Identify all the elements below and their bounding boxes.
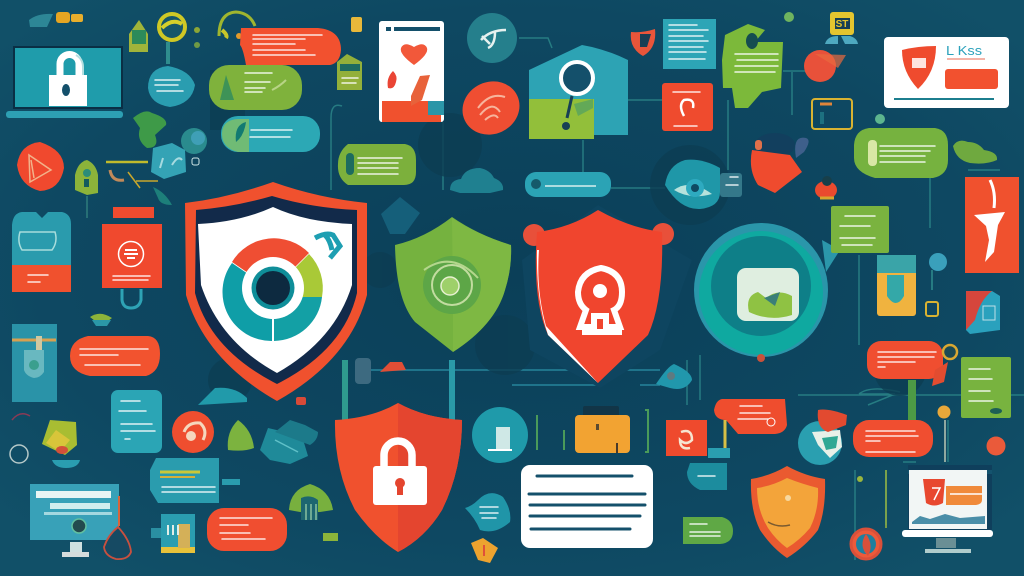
callout: teal pill centre [525, 172, 611, 197]
panel: teal globe with screen [694, 223, 840, 362]
callout: red pill lower right [853, 420, 933, 457]
callout: teal pill [221, 116, 320, 152]
panel: orange folder [575, 406, 630, 453]
panel: teal yellow card [151, 514, 195, 553]
icon: teal cloud small [198, 388, 247, 405]
icon: green mushroom [289, 484, 338, 541]
icon: small red apple [815, 176, 837, 199]
callout: teal text card [111, 390, 162, 453]
panel: orange shield [751, 466, 825, 558]
icon: teal u hook [122, 289, 141, 308]
icon: small orange shield [631, 29, 655, 56]
icon: yellow green blob [10, 414, 80, 468]
callout: green bubble [209, 65, 302, 110]
icon: teal cloud [450, 168, 503, 193]
small red bits [296, 358, 406, 405]
icon: teal circle with device [472, 407, 528, 463]
icon: green dot [784, 12, 794, 22]
panel: teal house with magnifier [529, 45, 628, 139]
panel: white text card [521, 465, 653, 548]
panel: red torch banner [965, 177, 1019, 273]
panel: teal card left with shield [12, 324, 57, 402]
callout: red tag bubble [714, 399, 787, 448]
antenna posts [342, 360, 455, 432]
callout: green text bubble [338, 144, 416, 185]
icon: green tag [129, 20, 148, 52]
icon: yellow green arc [219, 12, 255, 39]
panel: red shield with lock [335, 403, 462, 552]
icon: green cloud [953, 141, 997, 164]
icon: yellow pin [938, 406, 950, 462]
panel: yellow teal card [877, 255, 916, 316]
panel: red blue card [966, 291, 1000, 334]
panel: laptop with lock [6, 46, 123, 118]
panel: red shield with keyhole [522, 205, 692, 388]
icon: small blob and yellow pills [29, 12, 83, 27]
panel: phone card with heart [379, 21, 444, 122]
panel: green text card [961, 357, 1011, 418]
callout: green tag lower [683, 517, 733, 544]
icon: red circle right [804, 50, 846, 82]
panel: red label box [102, 207, 162, 288]
icon: red circle badge [172, 411, 214, 453]
callout: red pill left [70, 336, 160, 376]
callout: teal text card [663, 19, 716, 69]
callout: red pill upper right [867, 341, 943, 379]
icon: orange flag [471, 538, 498, 563]
icon: teal info blob [148, 66, 195, 107]
icon: yellow tag [825, 12, 858, 44]
connector lines [331, 38, 1024, 560]
icon: green and teal leaves [228, 420, 318, 464]
chart: donut [222, 238, 323, 341]
icon: green tag two [337, 54, 362, 90]
dark background silhouettes [208, 70, 926, 402]
icon: yellow ring key [908, 345, 957, 420]
callout: red pill lower [207, 508, 287, 551]
icon: yellow tag: ST [836, 19, 848, 30]
icon: teal speech blob [465, 493, 510, 531]
icon: red dot [986, 436, 1006, 456]
icon: yellow outline frame [812, 99, 852, 129]
icon: yellow ring [159, 14, 200, 64]
icon: dark diamond [381, 197, 420, 234]
callout: green card [831, 206, 889, 253]
icon: dark teal circle [467, 13, 517, 63]
icon: teal blob under shield [656, 364, 692, 389]
icon: green and orange poles [537, 410, 648, 452]
panel: white login card [884, 37, 1009, 108]
icon: red square badge [666, 420, 707, 456]
icon: red circle [454, 72, 528, 144]
icon: bowl above card [90, 314, 112, 326]
panel: green map blob [722, 24, 783, 108]
icon: red ring [104, 527, 131, 559]
icon: green dot [875, 114, 885, 124]
icon: red rounded triangle circle [17, 142, 64, 191]
panel: monitor with shield [902, 465, 993, 553]
icon: teal sphere with device [798, 410, 847, 465]
heading: card label: L Kss [946, 43, 983, 58]
callout: red text bubble [240, 28, 341, 65]
icon: cyan hook [315, 234, 340, 258]
icon: red label box [662, 83, 713, 131]
icon: teal speech box [687, 448, 730, 490]
icon: leaves and teal box [133, 111, 207, 179]
icon: blue balloon and tag [926, 253, 947, 316]
panel: teal card with red footer [12, 212, 71, 292]
panel: large shield with donut chart [185, 182, 367, 401]
callout: green bubble right [854, 128, 948, 178]
icon: teal cloud with eye [665, 160, 742, 209]
icon: red blob with dark cap [751, 133, 809, 193]
small leaf marks [106, 162, 172, 205]
icon: yellow chip [351, 17, 362, 32]
icon: padlock [373, 441, 427, 505]
icon: green bullet lock [75, 160, 98, 218]
panel: teal card lower left [150, 458, 240, 503]
panel: desktop monitor [30, 484, 131, 559]
panel: green shield [395, 217, 511, 352]
icon: ring orange [851, 470, 886, 559]
